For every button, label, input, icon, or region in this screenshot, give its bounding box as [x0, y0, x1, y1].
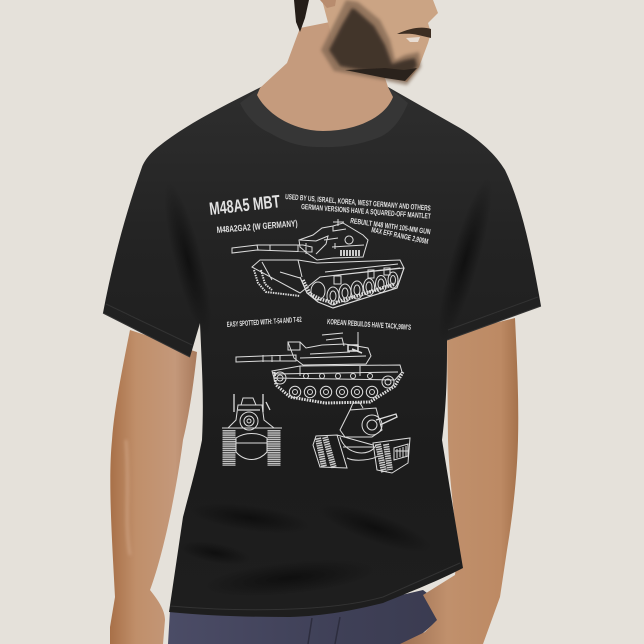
model: face	[294, 0, 438, 85]
note: users: USED BY US, ISRAEL, KOREA, WEST GERMANY AND OTHERS	[285, 192, 431, 213]
model: right arm and hand	[400, 318, 518, 644]
note: korean: KOREAN REBUILDS HAVE TACK,90M'S	[327, 317, 411, 332]
subheading: M48A2GA2: M48A2GA2 (W GERMANY)	[216, 218, 298, 235]
t-shirt	[103, 86, 541, 617]
heading: M48A5 MBT: M48A5 MBT	[208, 191, 281, 219]
collar	[240, 86, 408, 147]
model: jeans	[168, 590, 450, 644]
tank drawing: front three-quarter view	[313, 403, 410, 473]
note: range: MAX EFF RANGE 2,900M	[371, 225, 429, 246]
model: neck	[257, 20, 393, 131]
tank drawing: side view	[236, 332, 403, 403]
tank drawing: front view	[222, 394, 282, 466]
note: rebuilt: REBUILT M48 WITH 105-MM GUN	[350, 216, 431, 236]
tank drawing: three-quarter top	[232, 219, 404, 308]
beard	[321, 0, 421, 85]
print: text block	[208, 191, 431, 332]
model: left arm and hand	[110, 330, 197, 644]
note: german versions: GERMAN VERSIONS HAVE A SQUARED-OFF MANTLET	[301, 202, 431, 221]
note: spotted: EASY SPOTTED WITH: T-54 AND T-62	[227, 315, 302, 329]
